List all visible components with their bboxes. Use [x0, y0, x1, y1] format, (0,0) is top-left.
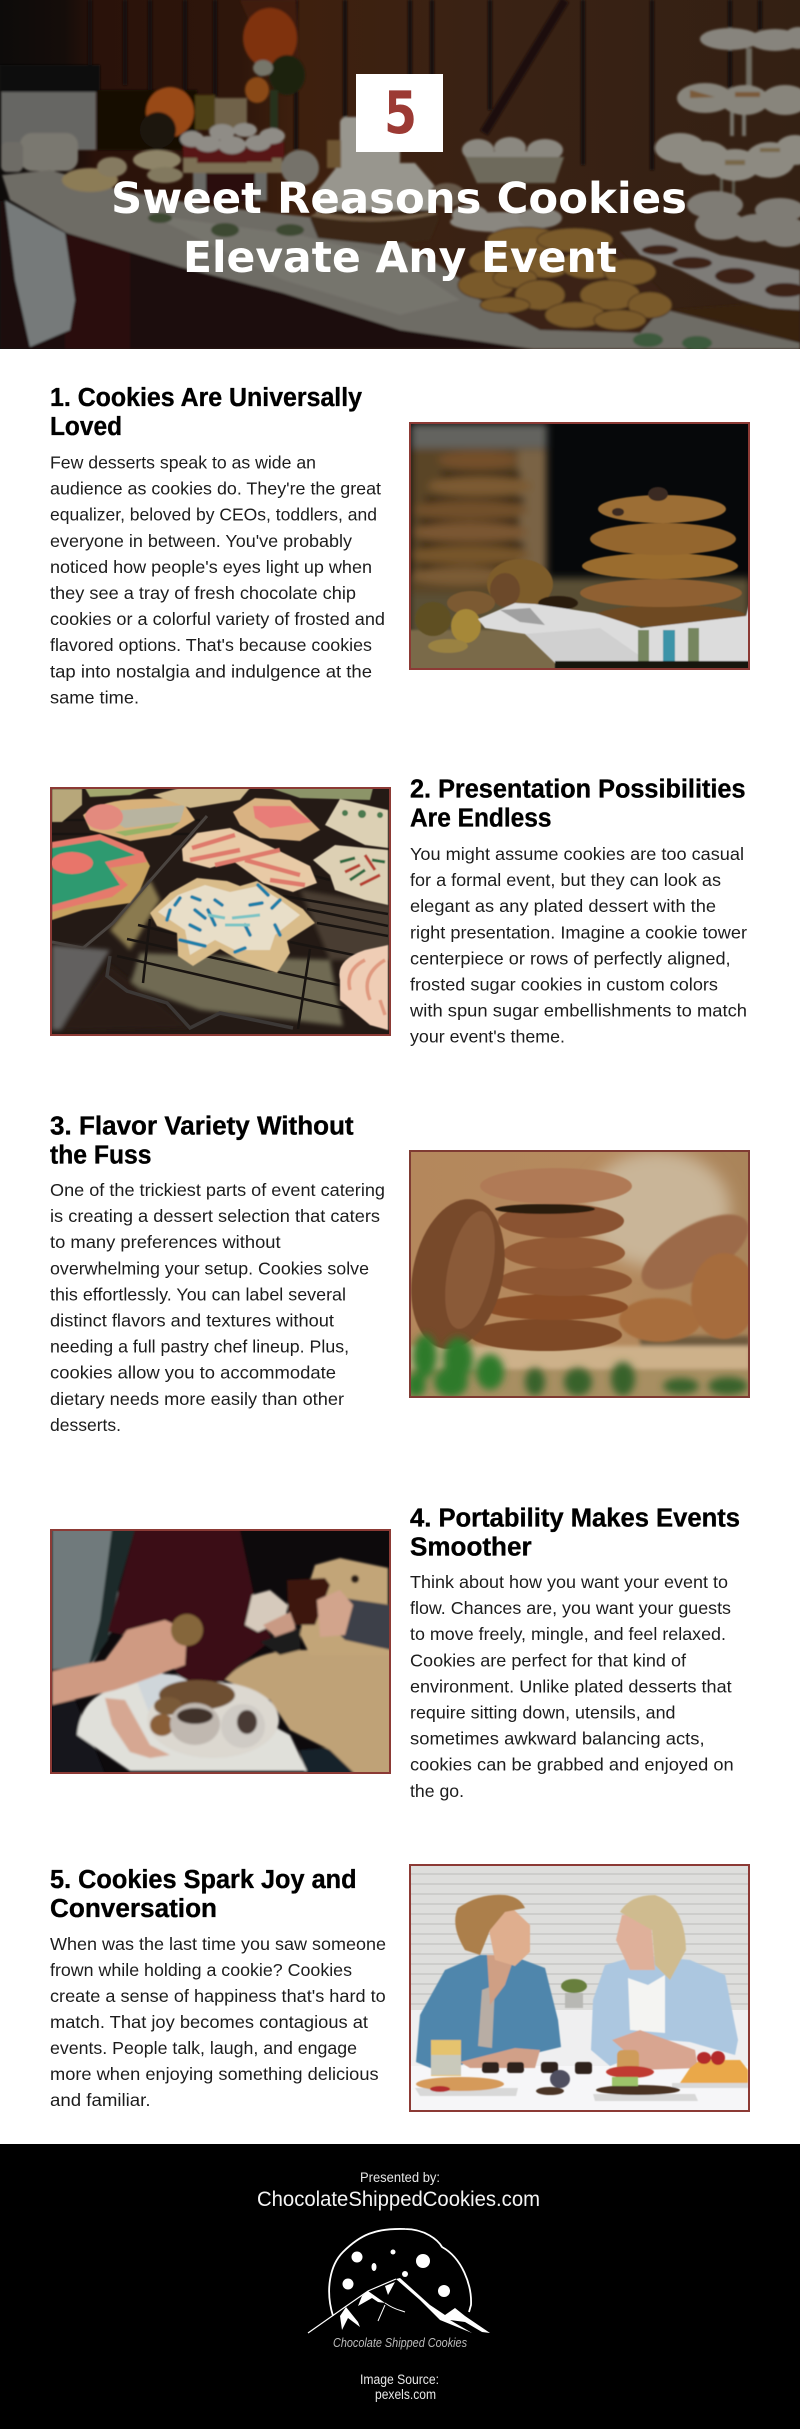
logo wordmark: Chocolate Shipped Cookies [333, 2335, 467, 2350]
body text 1: Few desserts speak to as wide an [50, 452, 316, 472]
body text 2: your event's theme. [410, 1027, 565, 1047]
body text 1: same time. [50, 687, 139, 707]
heading 5: 5. Cookies Spark Joy and [50, 1866, 357, 1894]
body text 5: match. That joy becomes contagious at [50, 2012, 368, 2032]
logo: cookie and mountains [308, 2229, 490, 2350]
body text 3: cookies allow you to accommodate [50, 1363, 336, 1383]
heading 4 [410, 1504, 740, 1562]
photo: people with cookies and teddy bear [50, 1529, 391, 1774]
body text 4: Think about how you want your event to [410, 1572, 728, 1592]
body text 3: this effortlessly. You can label several [50, 1284, 346, 1304]
title: Elevate Any Event [183, 233, 617, 283]
image source [360, 2372, 439, 2402]
body text 5 [50, 1934, 386, 2110]
body text 2: elegant as any plated dessert with the [410, 896, 716, 916]
body text 5: events. People talk, laugh, and engage [50, 2038, 357, 2058]
body text 1: cookies or a colorful variety of frosted and [50, 609, 385, 629]
body text 4 [410, 1572, 734, 1801]
body text 3 [50, 1180, 385, 1435]
heading 1 [50, 384, 363, 441]
presented by label: Presented by: [360, 2170, 440, 2185]
number badge [356, 74, 443, 152]
image source: Image Source: [360, 2372, 439, 2387]
body text 4: the go. [410, 1781, 464, 1801]
section 3 [50, 1112, 760, 1435]
photo: two women with cookies at table [409, 1864, 750, 2112]
body text 1: everyone in between. You've probably [50, 531, 352, 551]
body text 2: You might assume cookies are too casual [410, 844, 744, 864]
body text 3: dietary needs more easily than other [50, 1389, 344, 1409]
body text 3: One of the trickiest parts of event catering [50, 1180, 385, 1200]
footer [0, 2144, 800, 2429]
heading 5 [50, 1866, 357, 1923]
hero banner [0, 0, 800, 350]
heading 3: the Fuss [50, 1142, 152, 1170]
body text 1: they see a tray of fresh chocolate chip [50, 583, 356, 603]
body text 2: right presentation. Imagine a cookie tower [410, 922, 747, 942]
section 4 [50, 1504, 740, 1801]
photo: stack of cookies with greenery [398, 1150, 760, 1398]
heading 2 [410, 776, 746, 832]
white panel [1, 92, 96, 150]
heading 5: Conversation [50, 1895, 217, 1923]
title: Sweet Reasons Cookies [111, 174, 687, 224]
body text 5: When was the last time you saw someone [50, 1934, 386, 1954]
heading 1: 1. Cookies Are Universally [50, 384, 363, 412]
body text 2: centerpiece or rows of perfectly aligned, [410, 948, 731, 968]
tier stands [746, 48, 752, 86]
body text 4: to move freely, mingle, and feel relaxed. [410, 1624, 726, 1644]
body text 3: overwhelming your setup. Cookies solve [50, 1258, 369, 1278]
section 1 [50, 384, 750, 707]
cookies pile [479, 298, 654, 334]
number badge: 5 [384, 78, 417, 147]
body text 3: desserts. [50, 1415, 121, 1435]
photo: stacked chocolate chip cookies [409, 422, 750, 670]
heading 4: 4. Portability Makes Events [410, 1504, 740, 1532]
body text 4: environment. Unlike plated desserts that [410, 1676, 732, 1696]
body text 5: create a sense of happiness that's hard to [50, 1986, 386, 2006]
body text 4: flow. Chances are, you want your guests [410, 1598, 731, 1618]
body text 3: needing a full pastry chef lineup. Plus, [50, 1337, 349, 1357]
body text 5: frown while holding a cookie? Cookies [50, 1960, 352, 1980]
body text 3: is creating a dessert selection that caters [50, 1206, 380, 1226]
body text 2: with spun sugar embellishments to match [409, 1001, 747, 1021]
heading 1: Loved [50, 413, 122, 441]
heading 2: Are Endless [410, 804, 552, 832]
body text 1: audience as cookies do. They're the great [50, 479, 381, 499]
body text 4: require sitting down, utensils, and [410, 1702, 676, 1722]
photo: frosted sugar cookies on rack [50, 787, 391, 1036]
body text 3: to many preferences without [50, 1232, 281, 1252]
body text 1: equalizer, beloved by CEOs, toddlers, and [50, 505, 377, 525]
heading 3 [50, 1112, 354, 1170]
body text 1: noticed how people's eyes light up when [50, 557, 372, 577]
body text 2: for a formal event, but they can look as [410, 870, 721, 890]
image source: pexels.com [375, 2387, 436, 2402]
body text 1 [50, 452, 385, 707]
title [111, 174, 687, 283]
hero photo: dessert table [0, 0, 800, 350]
heading 3: 3. Flavor Variety Without [50, 1112, 354, 1140]
section 5 [50, 1864, 750, 2112]
body text 5: and familiar. [50, 2090, 150, 2110]
heading 2: 2. Presentation Possibilities [410, 776, 746, 804]
body text 5: more when enjoying something delicious [50, 2064, 379, 2084]
heading 4: Smoother [410, 1534, 532, 1562]
section 2 [50, 776, 747, 1047]
website name: ChocolateShippedCookies.com [257, 2188, 540, 2211]
body text 4: cookies can be grabbed and enjoyed on [410, 1755, 734, 1775]
body text 4: Cookies are perfect for that kind of [410, 1650, 686, 1670]
body text 2: frosted sugar cookies in custom colors [410, 974, 718, 994]
body text 1: tap into nostalgia and indulgence at the [50, 661, 372, 681]
body text 3: distinct flavors and textures without [50, 1310, 334, 1330]
body text 4: sometimes awkward balancing acts, [410, 1729, 705, 1749]
body text 2 [409, 844, 747, 1047]
body text 1: flavored options. That's because cookies [50, 635, 372, 655]
